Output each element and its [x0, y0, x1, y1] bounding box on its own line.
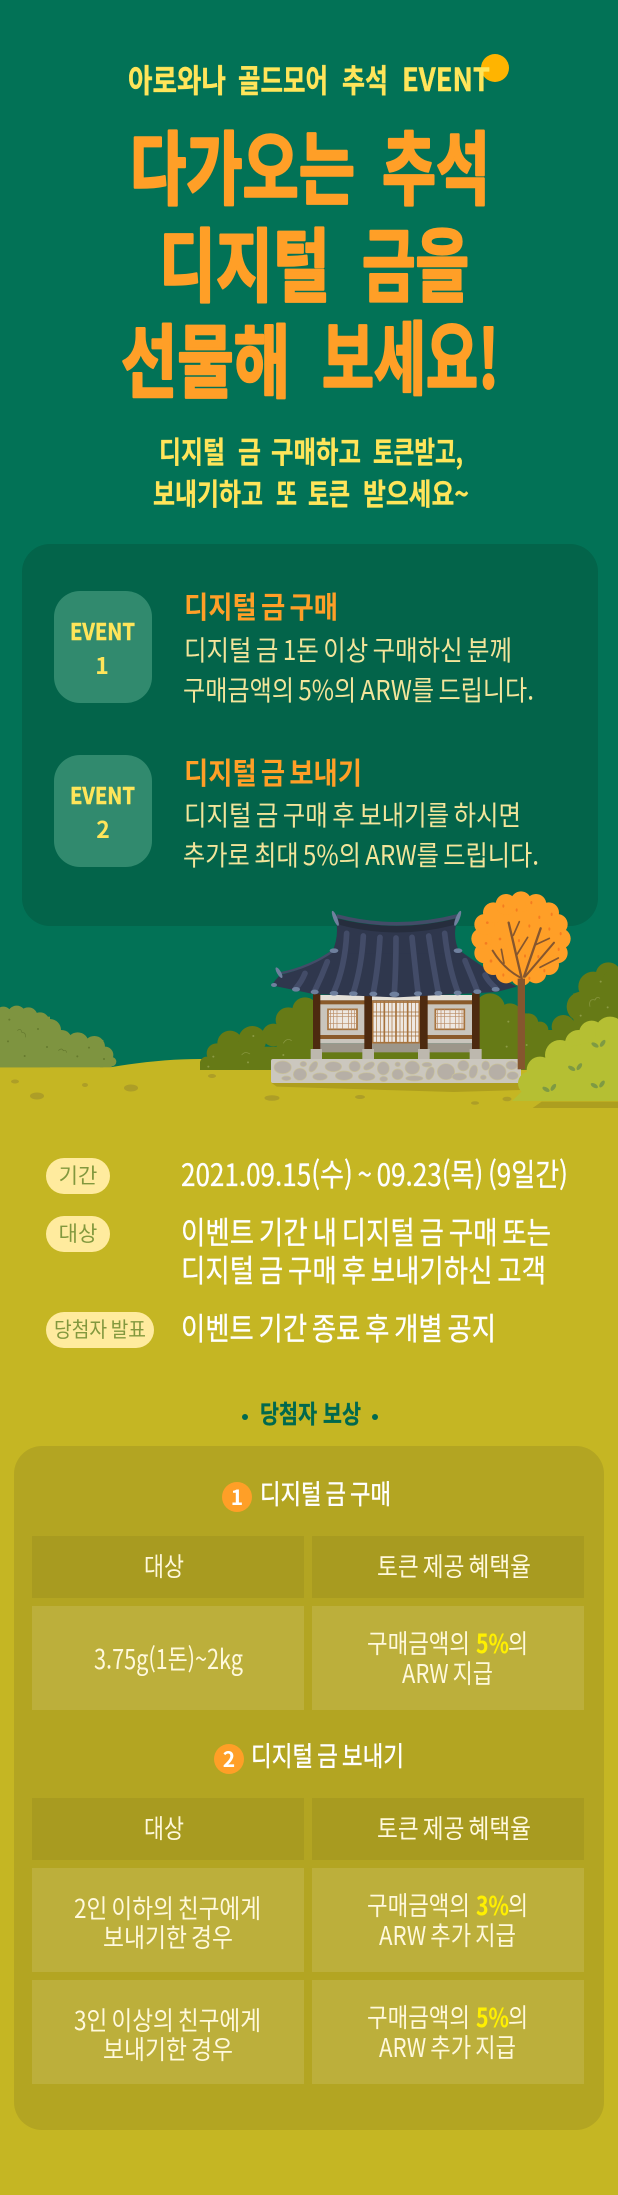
reward heading 2: 디지털 금 보내기: [251, 1735, 404, 1774]
info row: winner announcement: 이벤트 기간 종료 후 개별 공지: [181, 1304, 496, 1349]
panel: event details: [22, 544, 598, 926]
event 1 description: 구매금액의 5%의 ARW를 드립니다.: [183, 668, 534, 708]
badge: event 1: [54, 591, 152, 703]
main headline: [121, 106, 499, 415]
info row: winner announcement: 당첨자 발표: [54, 1314, 146, 1344]
number badge 2: [214, 1744, 244, 1774]
table 2: 5%: [476, 1998, 509, 2035]
sub headline: 보내기하고: [153, 470, 263, 514]
center door: [372, 1001, 420, 1043]
table 2: 의: [508, 1998, 528, 2035]
sun icon: [481, 54, 509, 82]
panel: rewards: [14, 1446, 604, 2130]
event kicker line: [128, 55, 490, 102]
event 2 description: [183, 793, 539, 873]
info row: period: [46, 1150, 568, 1195]
illustration: front bush: [512, 1017, 618, 1108]
table 2: 의: [508, 1886, 528, 1923]
table 1: 대상: [144, 1547, 184, 1584]
event kicker line: EVENT: [402, 55, 490, 101]
table 2: 3인 이상의 친구에게: [74, 2001, 261, 2038]
badge: event 2: [54, 755, 152, 867]
event 1 description: [183, 628, 534, 708]
event 2 heading: 디지털 금 보내기: [184, 749, 362, 793]
event 1 description: 디지털 금 1돈 이상 구매하신 분께: [184, 628, 512, 668]
illustration: autumn tree: [471, 891, 571, 1069]
table 2: 보내기한 경우: [103, 1918, 233, 1955]
event 2 description: 추가로 최대 5%의 ARW를 드립니다.: [183, 833, 539, 873]
table 1: 토큰 제공 혜택율: [377, 1547, 531, 1584]
columns: [311, 993, 482, 1059]
roof: [271, 910, 517, 997]
main headline: 다가오는: [130, 106, 355, 222]
table 2: ARW 추가 지급: [379, 2028, 516, 2065]
sub headline: 토큰받고,: [373, 428, 463, 472]
event kicker line: 추석: [342, 56, 388, 102]
badge: event 1: EVENT: [70, 613, 135, 647]
main headline: 선물해: [121, 299, 290, 415]
table 1: 의: [508, 1624, 528, 1661]
info row: target: [46, 1208, 551, 1291]
illustration: ground and back bushes: [0, 962, 618, 2195]
badge: event 2: EVENT: [70, 777, 135, 811]
sub headline: 디지털: [159, 428, 225, 472]
number badge 2: 2: [223, 1744, 235, 1774]
sub headline: 구매하고: [271, 428, 361, 472]
event 1 heading: 디지털 금 구매: [184, 583, 338, 627]
sub headline: 토큰: [308, 470, 350, 514]
info row: target: 대상: [59, 1218, 97, 1248]
table 2: 대상: [144, 1809, 184, 1846]
info row: period: 기간: [59, 1160, 97, 1190]
table 2: 2인 이하의 친구에게: [74, 1889, 261, 1926]
event kicker line: 골드모어: [238, 56, 328, 102]
table 2: 3%: [476, 1886, 509, 1923]
main headline: 추석: [382, 106, 490, 222]
main headline: 금을: [362, 203, 469, 319]
event 2 description: 디지털 금 구매 후 보내기를 하시면: [184, 793, 521, 833]
illustration: hanok house: [271, 910, 521, 1092]
header title block: [121, 54, 509, 514]
main headline: 디지털: [159, 203, 330, 319]
table 2: ARW 추가 지급: [379, 1916, 516, 1953]
event kicker line: 아로와나: [128, 56, 226, 102]
table 2: 구매금액의: [367, 1886, 470, 1923]
sub headline: 또: [276, 470, 297, 514]
badge: event 2: 2: [96, 811, 110, 845]
stone wall: [271, 1059, 521, 1083]
info row: target: 디지털 금 구매 후 보내기하신 고객: [181, 1246, 546, 1291]
section heading: winner rewards: 당첨자 보상: [260, 1395, 361, 1431]
table 2: 토큰 제공 혜택율: [377, 1809, 531, 1846]
info row: target: 이벤트 기간 내 디지털 금 구매 또는: [181, 1208, 551, 1253]
sub headline: 금: [238, 428, 261, 472]
table 2: 보내기한 경우: [103, 2030, 233, 2067]
badge: event 1: 1: [95, 647, 109, 681]
sub headline: [153, 428, 469, 514]
table 2: 구매금액의: [367, 1998, 470, 2035]
table 1: 3.75g(1돈)~2kg: [94, 1638, 243, 1677]
table 2: [32, 1798, 584, 2084]
sub headline: 받으세요~: [363, 470, 469, 514]
info row: winner announcement: [46, 1304, 496, 1349]
number badge 1: 1: [231, 1482, 243, 1512]
number badge 1: [222, 1482, 252, 1512]
table 1: 구매금액의: [367, 1624, 470, 1661]
table 1: 5%: [476, 1624, 509, 1661]
table 1: [32, 1536, 584, 1710]
table 1: ARW 지급: [402, 1654, 493, 1691]
windows: [328, 1009, 464, 1029]
main headline: 보세요!: [322, 296, 499, 412]
reward heading 1: 디지털 금 구매: [260, 1473, 391, 1512]
